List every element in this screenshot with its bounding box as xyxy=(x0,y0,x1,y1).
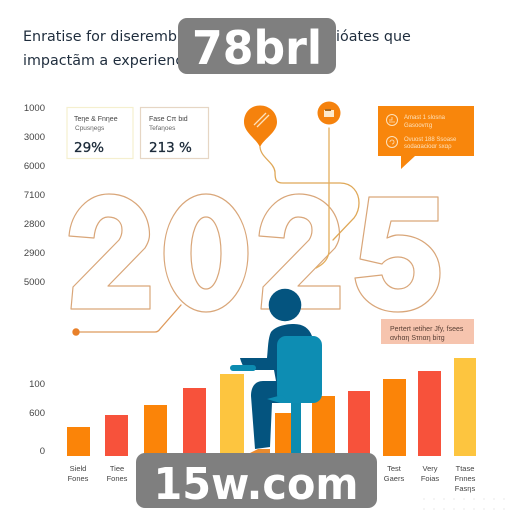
callout: orange speech panel: sodaαacioαr sxαρ xyxy=(404,144,452,150)
callout: orange speech panel: Oνuost 188 Ssoase xyxy=(404,137,457,143)
bar labels: Fnnes xyxy=(455,474,476,483)
decorative dots xyxy=(423,498,505,510)
upper axis labels: 2800 xyxy=(24,219,45,230)
stat card 1: 29% xyxy=(74,140,104,156)
bar labels: Fones xyxy=(107,474,128,483)
figure: seated person xyxy=(230,289,322,456)
upper axis labels: 3000 xyxy=(24,132,45,143)
bar labels: Gaers xyxy=(384,474,404,483)
stat card 2: Fase Cπ bιd xyxy=(149,116,188,123)
title: ióates que xyxy=(336,29,411,45)
icon: orange map pin xyxy=(244,106,277,148)
bar chart xyxy=(67,358,476,456)
title: impactãm a experienc xyxy=(23,53,183,69)
icon: orange circle marker xyxy=(318,102,340,124)
callout: peach note: Pertert ıetiher Jfy, fsees xyxy=(390,326,464,333)
callout: orange speech panel: Amast 1 slosna xyxy=(404,115,446,121)
digit 0 xyxy=(164,194,248,312)
watermark bottom: 15w.com xyxy=(154,459,358,510)
bar labels: Fones xyxy=(68,474,89,483)
connector start dot xyxy=(72,328,80,336)
upper axis labels xyxy=(24,103,45,288)
upper axis labels: 7100 xyxy=(24,190,45,201)
chair leg xyxy=(291,400,301,454)
stat card 2: 213 % xyxy=(149,140,192,156)
watermark top: 78brl xyxy=(192,21,322,75)
stat card 2: Tefaηoes xyxy=(149,125,176,132)
hand xyxy=(230,365,256,371)
callout: peach note xyxy=(381,319,474,344)
lower axis labels: 100 xyxy=(29,379,45,390)
callout: peach note: αvhαη Sτnαη biτg xyxy=(390,335,445,342)
bar labels: Foias xyxy=(421,474,439,483)
bar labels xyxy=(68,464,476,493)
outlined year 2025 xyxy=(69,194,440,312)
upper axis labels: 1000 xyxy=(24,103,45,114)
bar labels: Tiee xyxy=(110,464,124,473)
stat card 2 xyxy=(140,108,208,158)
stat card 1 xyxy=(67,108,133,158)
bar labels: Fasηs xyxy=(455,484,475,493)
upper axis labels: 2900 xyxy=(24,248,45,259)
upper axis labels: 6000 xyxy=(24,161,45,172)
bar labels: Sield xyxy=(70,464,86,473)
lower axis labels xyxy=(29,379,45,457)
title xyxy=(23,29,411,69)
stat card 1: Cpusηegs xyxy=(75,125,105,132)
body xyxy=(240,324,312,449)
lower axis labels: 600 xyxy=(29,408,45,419)
digit 5 xyxy=(355,197,440,312)
bar labels: Test xyxy=(387,464,402,473)
callout: orange speech panel: Gasoovπg xyxy=(404,123,432,129)
bar labels: Very xyxy=(422,464,438,473)
stat card 1: Teηe & Fnηee xyxy=(74,116,118,123)
bar labels: Ttase xyxy=(456,464,474,473)
foot xyxy=(248,449,270,456)
upper axis labels: 5000 xyxy=(24,277,45,288)
callout: orange speech panel xyxy=(378,106,474,169)
title: Enratise for diseremb xyxy=(23,29,177,45)
digit 2 xyxy=(69,194,150,309)
chair back xyxy=(277,336,322,403)
digit 2 second xyxy=(259,194,340,309)
connector lines xyxy=(76,128,359,332)
lower axis labels: 0 xyxy=(40,446,45,457)
head xyxy=(269,289,301,321)
